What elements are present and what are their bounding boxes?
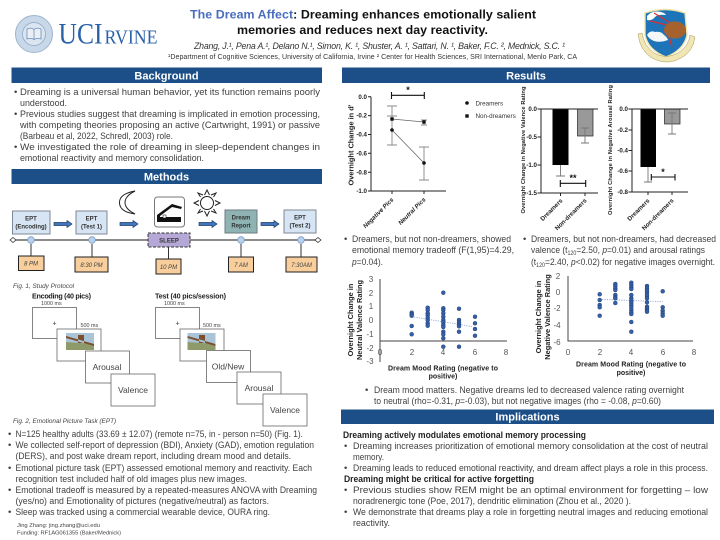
text block: background bullets: We investigated the role of dreaming in sleep-dependent changes in [20,142,320,153]
line chart: overnight change in d': -1.0 [356,188,368,195]
line chart: overnight change in d': -0.6 [356,150,368,157]
finding: valence and arousal: p=0.01) and arousal ratings [602,245,718,256]
logo: UC Irvine: UCI [58,18,102,50]
text block: methods bullets: • [8,429,11,440]
icon: moon [119,191,135,214]
time labels: 8:30 PM [80,263,103,269]
finding: dream mood: to neutral (rho=-0.31, p=-0.03), but not negative images (rho = -0.08, p=0.60) [374,396,661,407]
line chart: overnight change in d': Overnight Change in d' [346,104,356,186]
scatter plot: neutral valence rating: -2 [366,344,374,353]
emotional picture task: encoding sequence: 500 ms [80,323,98,329]
icon: sun [194,190,220,216]
scatter plot: neutral valence rating: 1 [369,302,374,311]
emotional picture task: test sequence: Test (40 pics/session) [155,292,227,300]
text block: methods bullets: (DERS), and post wake dream report, including dream mood and details. [16,451,291,462]
authors: Zhang, J.¹, Pena A.¹, Delano N.¹, Simon, K. ¹, Shuster, A. ¹, Sattari, N. ¹, Baker, F.C. ², Mednick, S.C. ¹ [193,41,565,51]
finding: valence and arousal: (t [531,257,537,268]
affiliations: ¹Department of Cognitive Sciences, University of California, Irvine ² Center for Health Sciences, SRI International, Menlo Park, CA [168,54,577,61]
emotional picture task: encoding sequence: Arousal [93,362,122,372]
scatter plot: neutral valence rating: 0 [369,316,374,325]
scatter plot: neutral valence rating: -3 [366,357,374,366]
significance bracket [651,167,675,180]
finding: valence and arousal: 120 [536,263,546,269]
line chart: overnight change in d': Negative Pics [362,196,396,230]
section header: Background [12,68,322,83]
line chart: overnight change in d': -0.2 [356,113,368,120]
time labels: 8 PM [24,262,38,268]
emotional picture task: encoding sequence: Encoding (40 pics) [32,292,92,300]
text block: background bullets [14,87,320,164]
scatter plot: neutral valence rating: 0 [378,348,383,357]
line chart: overnight change in d' [346,85,516,230]
emotional picture task: test sequence: Valence [270,405,300,415]
bar chart: negative valence rating: 0.0 [528,106,538,113]
step: EPT encoding: (Encoding) [15,224,47,230]
section header: Methods [12,169,322,184]
scatter plot: negative valence rating: 2 [556,272,561,281]
emotional picture task: test sequence: Arousal [245,383,274,393]
title: The Dream Affect: Dreaming enhances emotionally salient [190,8,536,22]
scatter plot: neutral valence rating: 4 [441,348,446,357]
text block: implications: • [344,507,347,518]
emotional picture task: test sequence: + [175,320,180,328]
bar chart: negative arousal rating: 0.0 [619,106,629,113]
text block: implications: • [344,441,347,452]
contact and funding: Funding: RF1AG061355 (Baker/Mednick) [17,530,121,536]
scatter plot: negative valence rating: 0 [556,288,561,297]
text block: background bullets: Dreaming is a universal human behavior, yet its function remains poorly [20,87,320,98]
legend: Dreamers [476,100,503,107]
significance bracket: * [661,167,665,177]
section header: Methods: Methods [144,172,189,184]
title [190,8,536,37]
text block: implications: noradrenergic tone (Poe, 2017), dendritic elimination (Zhou et al., 2020 ). [353,496,631,507]
bar chart: negative arousal rating: Dreamers [626,197,652,223]
scatter plot: neutral valence rating: 2 [369,289,374,298]
contact and funding: Jing Zhang: jing.zhang@uci.edu [17,523,100,529]
finding: valence and arousal: =2.40, [545,257,571,268]
text block: implications: reactivity. [353,518,390,529]
scatter plot: negative valence rating: Overnight Change in [534,280,543,353]
bar chart: negative arousal rating: Non-dreamers [641,197,676,232]
significance bracket [560,173,586,187]
time labels [18,256,317,274]
text block: background bullets: (Barbeau et al, 2022, Schredl, 2003) role. [20,131,173,142]
scatter plot: negative valence rating: -6 [553,338,561,347]
text block: methods bullets: • [8,463,11,474]
step: EPT test 2 [284,210,316,233]
text block: methods bullets: Sleep was tracked using a commercial wearable device, OURA ring. [16,507,270,518]
emotional picture task: test sequence: Old/New [212,362,245,372]
emotional picture task: encoding sequence: Valence [118,385,148,395]
line chart: overnight change in d': -0.8 [356,169,368,176]
scatter plot: negative valence rating: 0 [566,348,571,357]
scatter plot: neutral valence rating: positive) [429,374,457,380]
text block: methods bullets: • [8,440,11,451]
bar chart: negative valence rating: -0.5 [526,134,538,141]
scatter plot: negative valence rating: 6 [661,348,666,357]
scatter plot: neutral valence rating: 3 [369,275,374,284]
significance bracket [392,85,424,99]
text block: background bullets: understood. [20,98,67,109]
text block: methods bullets: • [8,485,11,496]
text block: methods bullets [8,429,317,518]
bar chart: negative valence rating: Overnight Change in Negative Valence Rating [521,86,527,214]
section header: Implications [341,410,714,424]
scatter plot: neutral valence rating: -1 [366,330,374,339]
icon: bed [154,197,184,227]
finding: valence and arousal: =2.50, [576,245,602,256]
emotional picture task: encoding sequence [32,292,155,406]
step: dream report [225,210,257,233]
step: EPT test 1: (Test 1) [81,224,102,230]
scatter plot: negative valence rating: 8 [692,348,697,357]
emotional picture task: test sequence [155,292,307,426]
scatter plot: negative valence rating: Dream Mood Rating (negative to [576,362,686,368]
text block: implications: Dreaming actively modulates emotional memory processing [343,430,586,441]
finding: valence and arousal [523,234,716,269]
text block: implications: Dreaming might be critical for active forgetting [344,474,534,485]
bar chart: negative valence rating: -1.5 [526,190,538,197]
significance bracket: ** [569,173,577,183]
step: dream report: Dream [232,216,250,222]
scatter plot: negative valence rating: -4 [553,321,561,330]
step: sleep [148,233,190,247]
finding: memory tradeoff: • [344,234,347,245]
text block: methods bullets: We collected self-report of depression (BDI), Anxiety (GAD), emotion regulation [16,440,314,451]
scatter plot: neutral valence rating: 8 [504,348,509,357]
time labels: 7:30AM [291,263,312,269]
step: EPT test 1: EPT [86,216,98,222]
scatter plot: negative valence rating: 2 [598,348,603,357]
bar chart: negative arousal rating [608,84,688,232]
scatter plot: neutral valence rating: 2 [410,348,415,357]
time labels: 7 AM [234,263,248,269]
finding: dream mood [365,385,684,407]
text block: methods bullets: recognition test included half of old images plus new images. [16,474,247,485]
text block: implications: • [344,463,347,474]
bar chart: negative arousal rating: -0.8 [617,189,629,196]
emotional picture task: test sequence: 500 ms [203,323,221,329]
finding: memory tradeoff: emotional memory tradeoff (F(1,95)=4.29, [352,245,514,256]
scatter plot: neutral valence rating: Overnight Change in [346,283,355,356]
scatter plot: neutral valence rating: Neutral Valence Rating [355,279,364,360]
finding: memory tradeoff: p=0.04). [351,257,383,268]
section header: Background: Background [134,70,199,82]
text block: implications [343,430,708,529]
text block: background bullets: • [14,109,17,120]
text block: background bullets: • [14,87,17,98]
scatter plot: neutral valence rating: Dream Mood Rating (negative to [388,366,498,372]
bar chart: negative arousal rating: Overnight Change in Negative Arousal Rating [608,84,614,215]
step: EPT encoding [12,211,50,234]
step: dream report: Report [231,224,251,230]
finding: valence and arousal: 120 [567,251,577,257]
text block: implications: Previous studies show REM might be an optimal environment for forgetting – low [353,485,708,496]
text block: background bullets: • [14,142,17,153]
text block: implications: • [344,485,347,496]
finding: memory tradeoff [344,234,514,268]
bar chart: negative arousal rating: -0.4 [617,148,629,154]
contact and funding [17,523,121,536]
scatter plot: negative valence rating [534,272,697,377]
finding: memory tradeoff: Dreamers, but not non-dreamers, showed [352,234,511,245]
time labels: 10 PM [160,265,177,271]
line chart: overnight change in d': -0.4 [356,132,368,139]
logo: UC Irvine [16,16,158,52]
emotional picture task: encoding sequence: + [52,320,57,328]
bar chart: negative valence rating: -1.0 [526,162,538,169]
bar chart: negative valence rating: Non-dreamers [554,197,589,232]
emotional picture task: encoding sequence: 1000 ms [41,301,62,307]
bar chart: negative arousal rating: -0.2 [617,127,629,134]
text block: implications: memory. [353,452,384,463]
finding: valence and arousal: valence (t [531,245,572,256]
line chart: overnight change in d': Neutral Pics [397,196,428,227]
scatter plot: negative valence rating: Negative Valence Rating [543,274,552,360]
text block: methods bullets: N=125 healthy adults (33.69 ± 12.07) (remote n=75, in - person n=50) (Fig. 1). [16,429,303,440]
legend: Non-dreamers [476,113,516,120]
scatter plot: negative valence rating: -2 [553,304,561,313]
step: EPT test 2: (Test 2) [290,224,310,230]
text block: methods bullets: Emotional picture task (EPT) assessed emotional memory and reactivity. Each [16,463,312,474]
step: EPT test 2: EPT [294,216,306,222]
text block: background bullets: emotional reactivity and memory consolidation. [20,153,204,164]
finding: dream mood: • [365,385,368,396]
caption: figure 1: Fig. 1, Study Protocol [13,283,75,290]
scatter plot: negative valence rating: positive) [617,370,645,377]
text block: background bullets: with competing theories proposing an active (Cartwright, 1991) or passive [19,120,320,131]
arrows between steps [54,220,279,228]
section header: Results: Results [506,70,546,82]
text block: implications: Dreaming increases prioritization of emotional memory consolidation at the cost of neutral [353,441,708,452]
section header: Results [342,68,710,83]
scatter plot: negative valence rating: 4 [629,348,634,357]
bar chart: negative valence rating: Dreamers [539,197,565,223]
bar chart: negative arousal rating: -0.6 [617,168,629,175]
section header: Implications: Implications [495,412,560,424]
significance bracket: * [406,85,410,95]
finding: dream mood: Dream mood matters. Negative dreams led to decreased valence rating overnight [374,385,684,396]
bar chart: negative valence rating [521,86,598,232]
step: EPT encoding: EPT [25,216,37,222]
step: sleep: SLEEP [159,238,179,244]
text block: background bullets: Previous studies suggest that dreaming is implicated in emotion processing, [20,109,320,120]
caption: figure 2: Fig. 2, Emotional Picture Task (EPT) [13,418,116,425]
step: EPT test 1 [76,211,107,234]
scatter plot: neutral valence rating: 6 [473,348,478,357]
line chart: overnight change in d': 0.0 [358,94,368,101]
study protocol timeline [10,190,321,274]
text block: methods bullets: Emotional tradeoff is measured by a repeated-measures ANOVA with Dreaming [16,485,317,496]
logo: UC Irvine: RVINE [104,28,158,48]
finding: valence and arousal: • [523,234,526,245]
text block: methods bullets: • [8,507,11,518]
text block: methods bullets: (yes/no) and Emotionality of pictures (negative/neutral) as factors. [16,496,269,507]
logo: sleep and cognition crest [638,10,695,62]
title: memories and reduces next day reactivity. [237,23,488,37]
legend [465,100,516,120]
emotional picture task: test sequence: 1000 ms [164,301,185,307]
scatter plot: neutral valence rating [346,275,509,380]
